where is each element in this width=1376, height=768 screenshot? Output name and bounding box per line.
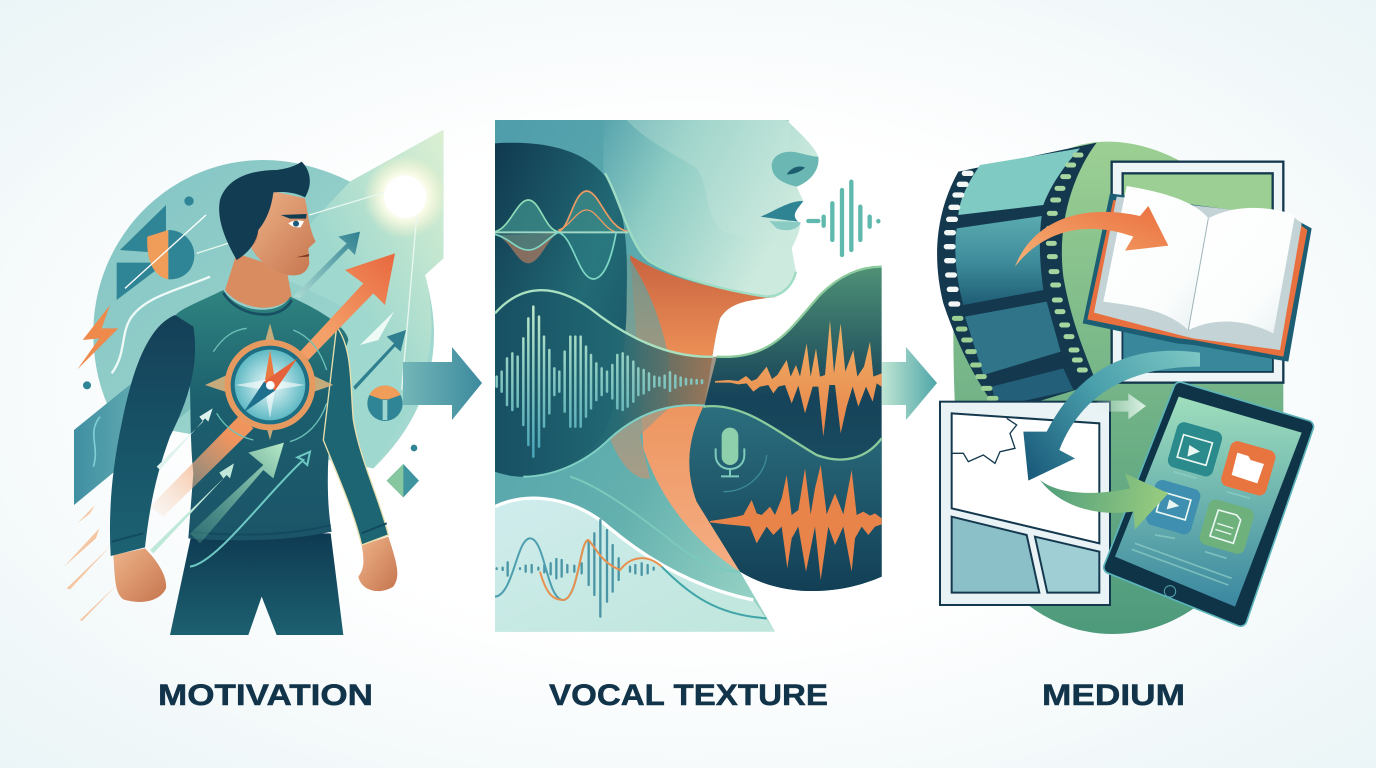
legs xyxy=(170,533,343,635)
pale small arrow xyxy=(1097,393,1146,419)
arrow: book to comic xyxy=(1023,351,1200,481)
face profile xyxy=(603,120,819,297)
label: medium: MEDIUM xyxy=(1042,679,1185,712)
left hand xyxy=(113,548,166,602)
orange waveform upper xyxy=(715,320,882,437)
face xyxy=(247,192,316,275)
bottom sine wave xyxy=(495,538,588,600)
geometric shapes and small pie xyxy=(83,196,417,451)
neck xyxy=(225,253,292,308)
right side pie and diamond xyxy=(367,385,419,497)
orange waveform lower xyxy=(710,465,882,580)
hem and cuffs xyxy=(112,523,387,542)
icon: lightning bolt xyxy=(77,305,118,369)
neck shadow overlay xyxy=(610,248,668,479)
sun with rays xyxy=(197,155,447,390)
right sleeve xyxy=(323,327,388,545)
tablet xyxy=(1110,388,1307,620)
icon: video tile xyxy=(1144,478,1202,536)
hair xyxy=(219,162,310,260)
panel: medium illustration xyxy=(937,142,1312,634)
icon: clapper video xyxy=(1166,420,1224,478)
lips xyxy=(761,201,803,222)
lens band with wave lines xyxy=(495,290,717,477)
label: motivation: MOTIVATION xyxy=(158,679,373,712)
ear xyxy=(241,221,258,246)
teal waveform bars xyxy=(497,307,702,457)
film strip xyxy=(937,143,1097,413)
compass emblem xyxy=(205,323,333,442)
bottom bars xyxy=(497,520,654,617)
neck shape xyxy=(630,255,777,572)
panel: motivation illustration xyxy=(64,130,447,635)
arrow: film to book xyxy=(1015,206,1168,267)
bottom light wave panel xyxy=(495,477,775,632)
left sleeve xyxy=(110,315,195,556)
icon: document xyxy=(1198,498,1256,556)
right hand xyxy=(358,537,397,591)
upper blob small waves xyxy=(495,191,628,279)
film frames xyxy=(958,148,1080,215)
eye and brow xyxy=(281,214,309,257)
icon: folder xyxy=(1219,439,1277,497)
frame behind book xyxy=(1112,162,1283,383)
nose xyxy=(772,152,819,187)
arrow: vocal texture to medium xyxy=(882,347,937,420)
open book xyxy=(1083,186,1312,362)
collar xyxy=(223,293,292,314)
background circle and rising wedge xyxy=(74,130,443,505)
arrow: motivation to vocal texture xyxy=(403,347,482,420)
panel: vocal texture illustration xyxy=(495,120,882,632)
man figure xyxy=(110,162,397,635)
label: vocal texture: VOCAL TEXTURE xyxy=(549,679,828,712)
shirt arrows xyxy=(150,408,310,567)
icon: microphone xyxy=(716,428,767,492)
speed streaks xyxy=(64,505,117,621)
sound bars from mouth xyxy=(808,182,878,255)
small background arrows xyxy=(293,232,406,390)
arrow: comic to tablet xyxy=(1040,473,1168,529)
torso xyxy=(175,290,348,540)
big orange arrow xyxy=(150,253,395,517)
right dark panel with orange waveforms xyxy=(689,267,882,591)
left dark blob xyxy=(495,143,627,477)
base teal area xyxy=(495,120,792,632)
comic page xyxy=(940,402,1110,605)
green backdrop xyxy=(953,142,1283,634)
